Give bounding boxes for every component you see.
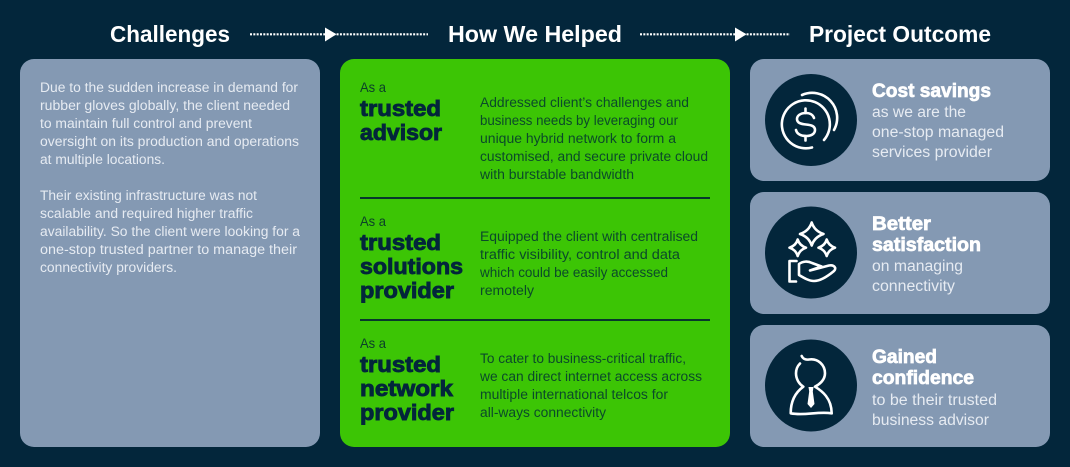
text: gained confidence: confidence xyxy=(872,368,974,389)
section: trusted solutions provider: traffic visibility, control and data xyxy=(480,247,681,262)
text block: challenge description: oversight on its production and operations xyxy=(40,134,299,149)
panel: how we helped xyxy=(340,59,730,447)
text: better satisfaction: connectivity xyxy=(872,278,955,295)
text: gained confidence: Gained xyxy=(872,347,937,368)
section: trusted network provider: all-ways connectivity xyxy=(480,405,606,420)
text block: challenge description: at multiple locations. xyxy=(40,152,165,167)
section: trusted solutions provider: provider xyxy=(360,278,454,303)
text block: infrastructure description: connectivity providers. xyxy=(40,260,177,275)
section: trusted solutions provider: which could be easily accessed xyxy=(479,265,668,280)
section: trusted solutions provider: remotely xyxy=(480,283,534,298)
text block: challenge description xyxy=(40,80,299,167)
text: gained confidence xyxy=(872,347,997,429)
section: trusted advisor xyxy=(360,79,708,182)
text block: infrastructure description: scalable and required higher traffic xyxy=(40,206,253,221)
text: better satisfaction: on managing xyxy=(872,258,963,275)
text: better satisfaction xyxy=(872,214,981,295)
icon: dollar coin xyxy=(765,74,857,166)
section: trusted network provider: To cater to business-critical traffic, xyxy=(480,351,686,366)
section: trusted advisor: As a xyxy=(360,79,386,95)
section: trusted solutions provider xyxy=(360,213,698,303)
text: cost savings: services provider xyxy=(872,144,992,161)
section: trusted network provider: network xyxy=(360,376,454,401)
icon: hand with sparkles xyxy=(765,206,857,298)
text: cost savings: as we are the xyxy=(872,104,966,121)
heading: Project Outcome: Project Outcome xyxy=(809,21,991,47)
icon: business person xyxy=(765,340,857,432)
arrow: challenges to how we helped xyxy=(250,28,428,42)
panel: challenges xyxy=(20,59,320,447)
panel: cost savings xyxy=(750,59,1050,181)
panel: better satisfaction xyxy=(750,192,1050,314)
section: trusted advisor: with burstable bandwidth xyxy=(479,167,634,182)
text block: infrastructure description: availability. So the client were looking for a xyxy=(40,224,300,239)
section: trusted network provider: As a xyxy=(360,335,386,351)
heading: How We Helped: How We Helped xyxy=(448,21,622,47)
section: trusted solutions provider: Equipped the client with centralised xyxy=(480,229,698,244)
section: trusted network provider: provider xyxy=(360,400,454,425)
section: trusted network provider: multiple international telcos for xyxy=(480,387,669,402)
section: trusted network provider: we can direct internet access across xyxy=(479,369,702,384)
panel: gained confidence xyxy=(750,325,1050,447)
section: trusted solutions provider: trusted xyxy=(360,230,441,255)
section: trusted advisor: business needs by leveraging our xyxy=(480,113,678,128)
section: trusted advisor: customised, and secure private cloud xyxy=(480,149,708,164)
section: trusted advisor: unique hybrid network to form a xyxy=(480,131,676,146)
section: trusted network provider xyxy=(360,335,702,425)
section: trusted solutions provider: solutions xyxy=(360,254,463,279)
text block: challenge description: rubber gloves globally, the client needed xyxy=(40,98,290,113)
text block: infrastructure description: one-stop trusted partner to manage their xyxy=(40,242,298,257)
arrow: how we helped to project outcome xyxy=(640,28,790,42)
heading: Challenges: Challenges xyxy=(110,21,230,47)
text block: infrastructure description: Their existing infrastructure was not xyxy=(40,188,257,203)
text block: challenge description: to maintain full control and prevent xyxy=(40,116,252,131)
text: cost savings: one-stop managed xyxy=(872,124,1004,141)
section: trusted advisor: advisor xyxy=(360,120,442,145)
section: trusted advisor: trusted xyxy=(360,96,441,121)
section: trusted advisor: Addressed client’s challenges and xyxy=(480,95,689,110)
text: cost savings xyxy=(872,81,1004,161)
text: better satisfaction: Better xyxy=(872,214,932,235)
text: gained confidence: to be their trusted xyxy=(872,392,997,409)
text: better satisfaction: satisfaction xyxy=(872,235,981,256)
text block: infrastructure description xyxy=(40,188,300,275)
section: trusted network provider: trusted xyxy=(360,352,441,377)
text block: challenge description: Due to the sudden increase in demand for xyxy=(40,80,299,95)
text: cost savings: Cost savings xyxy=(872,81,991,102)
section: trusted solutions provider: As a xyxy=(360,213,386,229)
text: gained confidence: business advisor xyxy=(872,412,989,429)
